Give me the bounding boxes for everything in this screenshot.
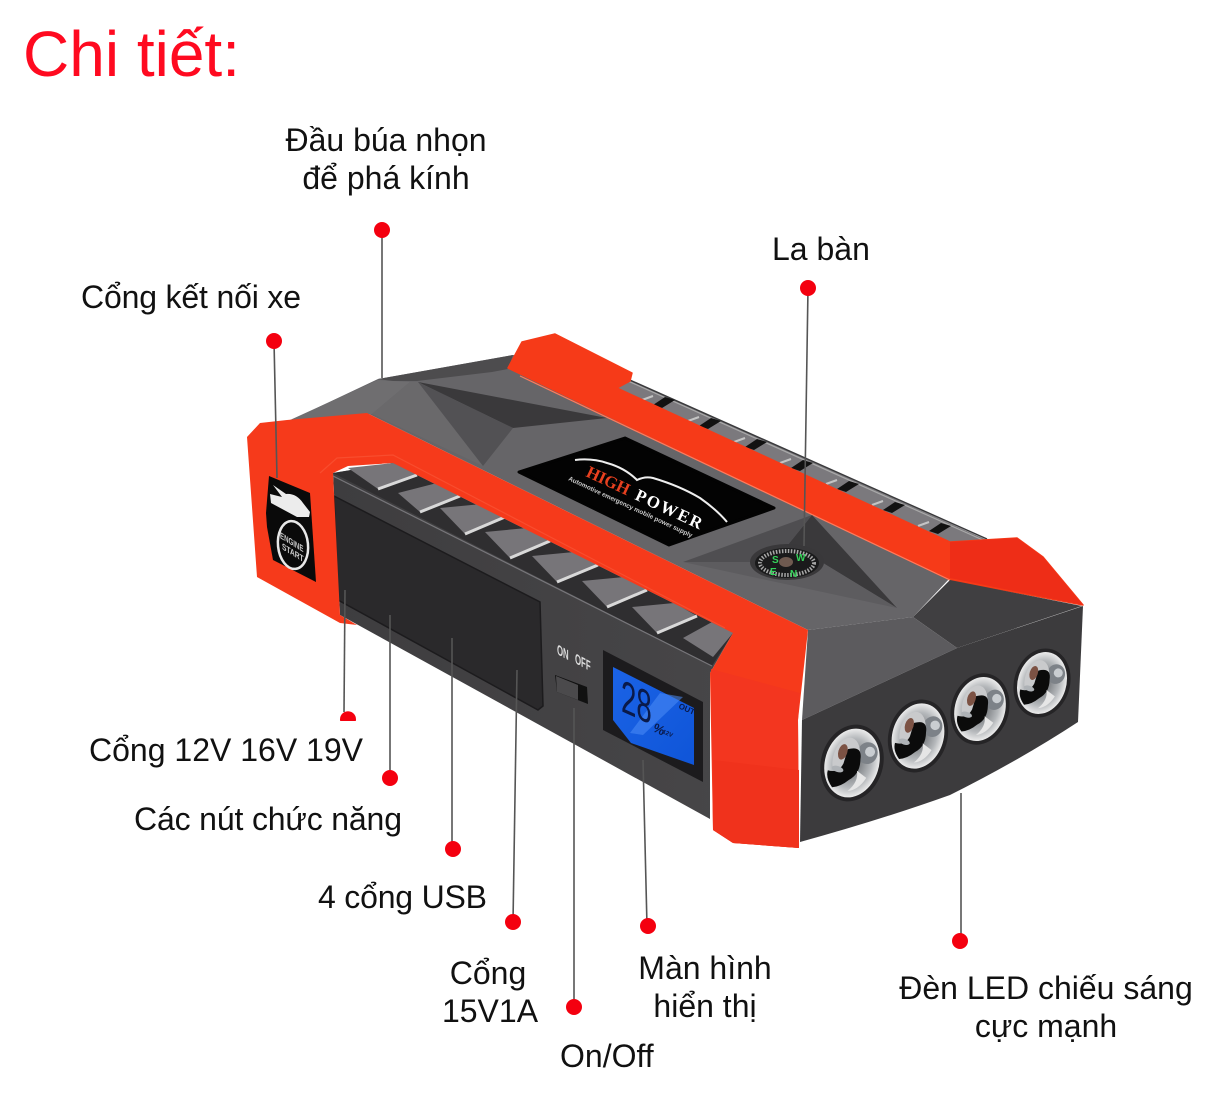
label: hammer tip: để phá kính <box>302 160 470 196</box>
icon: engine start button: ENGINE <box>280 530 303 554</box>
right triangle facets with compass recess <box>683 515 897 608</box>
on/off switch: ON <box>557 641 569 664</box>
rear vent strip <box>610 377 987 552</box>
label: 15V1A port: Cổng <box>450 955 526 991</box>
title: Chi tiết: <box>23 18 240 90</box>
side vent bed <box>333 463 733 666</box>
label: 12V 16V 19V port: Cổng 12V 16V 19V <box>89 732 364 768</box>
compass: N <box>790 569 797 580</box>
label: LED light <box>899 970 1193 1044</box>
top rear dark edge <box>378 355 513 381</box>
logo plate: Automotive emergency mobile power supply <box>567 475 694 539</box>
compass: E <box>770 567 777 578</box>
top dark triangle facets <box>418 382 607 466</box>
label: on/off: On/Off <box>560 1038 654 1074</box>
label: car connector: Cổng kết nối xe <box>81 279 301 315</box>
label: 15V1A port: 15V1A <box>442 993 539 1029</box>
red front-left bumper <box>247 413 808 848</box>
marker dots <box>266 222 968 1015</box>
compass <box>750 544 824 580</box>
jump starter device <box>247 334 1083 848</box>
icon: engine start button <box>276 520 310 570</box>
LCD display: 12V <box>661 729 673 739</box>
icon: car <box>270 485 310 517</box>
black start badge <box>266 476 316 582</box>
on/off switch: OFF <box>575 650 591 675</box>
side vent slats <box>348 463 733 657</box>
compass: S <box>772 555 779 566</box>
label: LED light: Đèn LED chiếu sáng <box>899 970 1193 1006</box>
label: hammer tip <box>285 122 487 196</box>
label: display: Màn hình <box>638 950 772 986</box>
logo plate <box>519 438 774 545</box>
LCD display: OUT <box>677 702 696 717</box>
label: USB ports: 4 cổng USB <box>318 879 487 915</box>
LCD display: 28 <box>621 671 652 735</box>
leader lines <box>274 230 961 1007</box>
front face upper dark <box>913 580 1082 648</box>
logo plate: POWER <box>632 485 706 533</box>
label: display: hiển thị <box>653 988 757 1024</box>
compass: W <box>796 553 806 564</box>
label: function buttons: Các nút chức năng <box>134 801 402 837</box>
label: compass: La bàn <box>772 231 870 267</box>
on/off switch <box>555 641 591 704</box>
LCD display: % <box>651 720 668 739</box>
rear red bumper <box>508 334 1083 605</box>
top left facet <box>290 380 410 420</box>
logo plate: HIGH <box>583 462 633 499</box>
top face <box>287 355 950 630</box>
label: LED light: cực mạnh <box>975 1008 1117 1044</box>
label: hammer tip: Đầu búa nhọn <box>285 122 487 158</box>
front face upper light <box>802 617 957 720</box>
label: display <box>638 950 772 1024</box>
port cover panel <box>334 496 543 710</box>
LED lights <box>811 641 1079 809</box>
label: 15V1A port <box>442 955 539 1029</box>
side face <box>333 463 733 819</box>
icon: engine start button: START <box>282 541 304 564</box>
LCD display <box>603 650 703 782</box>
front face <box>800 606 1083 842</box>
